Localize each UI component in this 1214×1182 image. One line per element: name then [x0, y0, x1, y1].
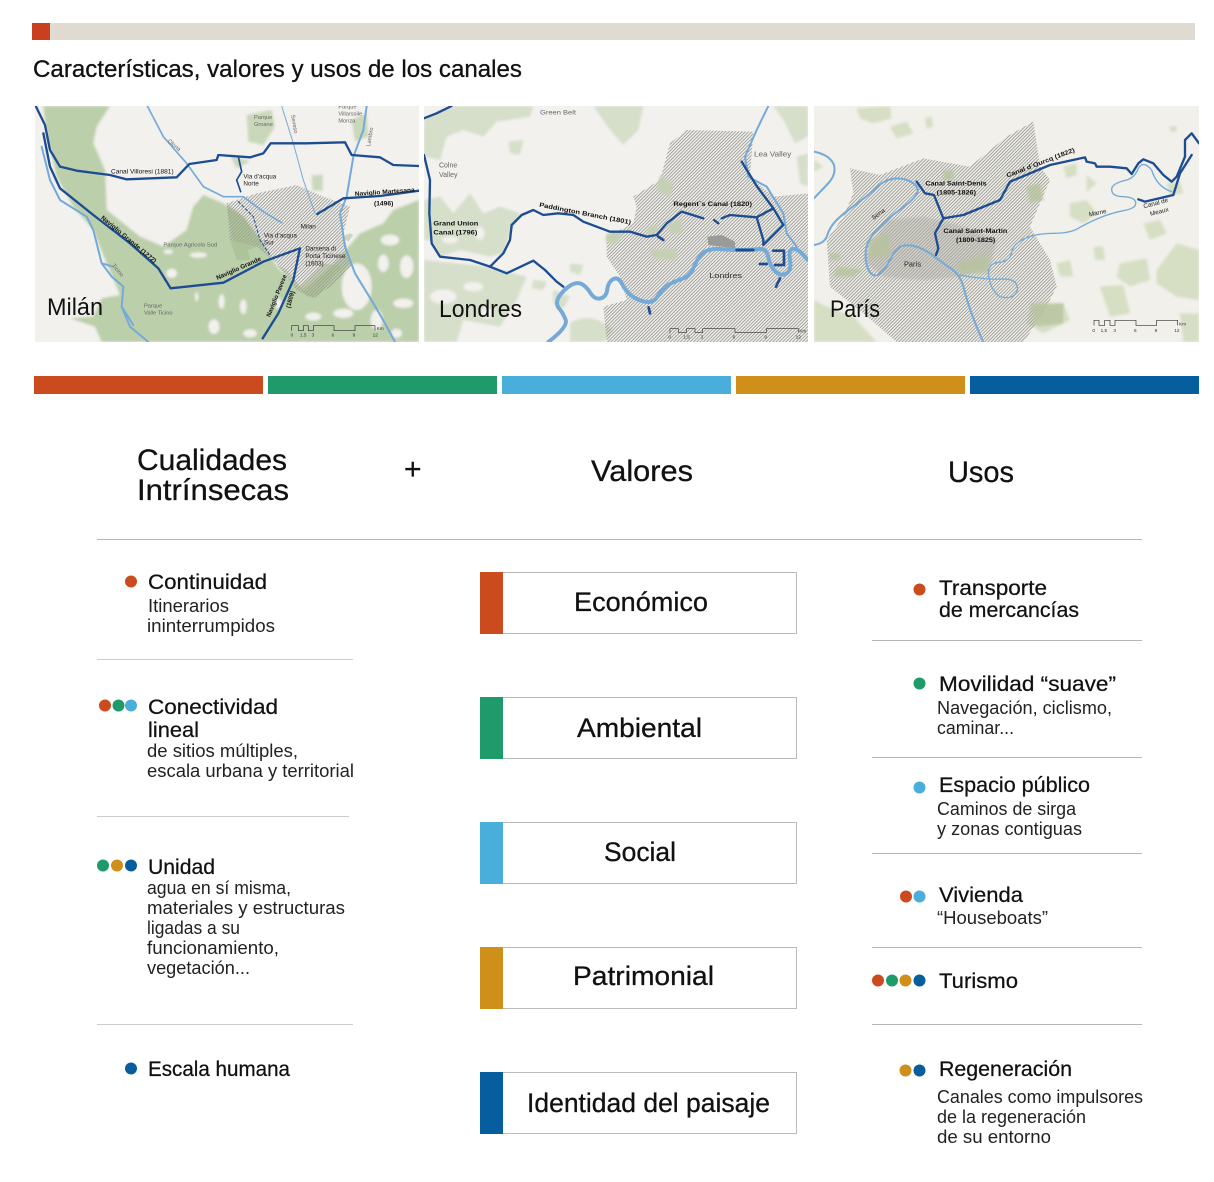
panel: map of Paris: (1809-1825)	[956, 237, 995, 244]
panel: map of Paris: París	[904, 259, 921, 268]
use: Regeneración	[900, 1058, 1143, 1147]
use: Regeneración: de su entorno	[937, 1127, 1051, 1147]
panel: map of Milan: (1603)	[305, 260, 324, 267]
panel: map of Paris: Sena	[870, 207, 887, 222]
panel: map of London: Green Belt	[540, 109, 576, 116]
panel: map of London: Canal (1796)	[433, 229, 477, 236]
quality: Conectividad lineal	[99, 696, 354, 781]
value box: Social: Social	[604, 837, 676, 867]
use: Regeneración: Regeneración	[939, 1058, 1072, 1081]
panel: map of Milan: Via d’acqua	[243, 173, 277, 180]
panel: map of Paris: 0	[1092, 328, 1095, 333]
panel: map of Milan: Villarssile	[338, 111, 362, 117]
quality: Conectividad lineal: de sitios múltiples,	[147, 741, 298, 761]
use: Vivienda: Vivienda	[939, 884, 1023, 907]
map label: Milán: Milán	[47, 294, 103, 321]
panel: map of London: 0	[668, 334, 671, 339]
panel: map of London: Valley	[439, 172, 458, 179]
use: Movilidad suave: caminar...	[937, 718, 1014, 738]
panel: map of London: Regent´s Canal (1820)	[673, 201, 752, 208]
use: Regeneración: Canales como impulsores	[937, 1087, 1143, 1107]
use: Espacio público	[914, 774, 1090, 839]
use: Transporte de mercancías: de mercancías	[939, 599, 1079, 622]
panel: map of Paris: 1,5	[1101, 328, 1108, 333]
panel: map of Milan: Via d’acqua	[264, 232, 297, 239]
panel: map of Milan: (1809)	[285, 290, 296, 309]
quality: Conectividad lineal: lineal	[148, 719, 199, 742]
panel: map of Milan: Parque	[144, 303, 162, 309]
panel: map of Milan: (1496)	[374, 200, 393, 207]
panel: map of Milan: Valle Ticino	[144, 311, 173, 317]
panel: map of Paris	[814, 106, 1199, 342]
panel: map of Milan: 9	[353, 333, 356, 338]
value box: Identidad del paisaje	[480, 1072, 796, 1134]
quality: Escala humana: Escala humana	[148, 1058, 290, 1081]
heading: Cualidades Intrínsecas: Cualidades	[137, 444, 287, 477]
quality: Unidad: materiales y estructuras	[147, 898, 345, 918]
use: Movilidad suave: Navegación, ciclismo,	[937, 698, 1112, 718]
panel: map of London: Londres	[709, 271, 742, 280]
plus sign: +	[404, 453, 422, 486]
map label: París: París	[830, 296, 880, 323]
panel: map of London: 3	[701, 334, 704, 339]
value box: Ambiental: Ambiental	[577, 713, 702, 743]
panel: map of Milan	[34, 104, 419, 342]
quality: Continuidad: Continuidad	[148, 571, 267, 594]
use: Espacio público: Espacio público	[939, 774, 1090, 797]
panel: map of Paris: Canal Saint-Denis	[925, 180, 987, 187]
quality: Unidad	[97, 856, 345, 978]
panel: map of Paris: 9	[1155, 328, 1158, 333]
quality: Continuidad: Itinerarios	[148, 596, 229, 616]
panel: map of Milan: Seveso	[289, 114, 298, 134]
panel: map of London: 6	[733, 334, 736, 339]
panel: map of London: Grand Union	[433, 221, 478, 228]
panel: map of Milan: Km	[377, 326, 384, 331]
value box: Patrimonial: Patrimonial	[573, 961, 714, 991]
panel: map of London: Km	[799, 329, 806, 334]
panel: map of Paris: Km	[1179, 322, 1186, 327]
panel: map of London: Paddington Branch (1801)	[539, 202, 632, 226]
panel: map of Milan: Naviglio Pavese	[265, 273, 289, 318]
value box: Identidad del paisaje: Identidad del paisaje	[527, 1088, 770, 1118]
panel: map of Milan: Parque Agricola Sud	[163, 243, 217, 249]
use: Turismo	[872, 970, 1018, 993]
value box: Patrimonial	[480, 947, 796, 1009]
value box: Económico	[480, 572, 796, 634]
quality: Unidad: Unidad	[148, 856, 215, 879]
panel: map of London: Colne	[439, 162, 457, 169]
panel: map of Milan: Milan	[301, 224, 316, 231]
value box: Ambiental	[480, 697, 796, 759]
panel: map of Milan: Naviglio Martesana	[355, 187, 415, 198]
use: Vivienda	[900, 884, 1048, 928]
panel: map of Milan: Lambro	[366, 127, 375, 147]
panel: map of Milan: Parque	[254, 115, 272, 121]
use: Movilidad suave	[914, 673, 1116, 738]
map label: Londres: Londres	[439, 296, 522, 323]
use: Transporte de mercancías: Transporte	[939, 577, 1047, 600]
use: Espacio público: y zonas contiguas	[937, 819, 1082, 839]
quality: Conectividad lineal: escala urbana y territorial	[147, 761, 354, 781]
quality: Conectividad lineal: Conectividad	[148, 696, 278, 719]
panel: map of Milan: Groane	[254, 122, 273, 128]
panel: map of Paris: Canal Saint-Martin	[943, 228, 1007, 235]
quality: Unidad: funcionamiento,	[147, 938, 279, 958]
heading: Valores: Valores	[591, 455, 693, 488]
colour legend bar	[34, 376, 1199, 394]
panel: map of Paris: Canal de	[1143, 197, 1169, 210]
panel: map of Paris: Marne	[1088, 208, 1108, 219]
use: Vivienda: “Houseboats”	[937, 908, 1048, 928]
quality: Continuidad: ininterrumpidos	[147, 616, 275, 636]
panel: map of Paris: 6	[1134, 328, 1137, 333]
panel: map of London: Lea Valley	[754, 152, 792, 159]
panel: map of Milan: Porta Ticinese	[305, 253, 346, 260]
heading: Usos: Usos	[948, 456, 1014, 489]
use: Turismo: Turismo	[939, 970, 1018, 993]
panel: map of London: 12	[796, 334, 801, 339]
value box: Social	[480, 822, 796, 884]
quality: Unidad: ligadas a su	[147, 918, 240, 938]
panel: map of Paris: Meaux	[1149, 206, 1170, 218]
panel: map of Milan: Naviglio Grande	[215, 256, 263, 282]
panel: map of Paris: 3	[1113, 328, 1116, 333]
quality: Unidad: agua en sí misma,	[147, 878, 291, 898]
header bar	[32, 23, 1195, 40]
panel: map of Milan: Olona	[166, 139, 182, 153]
panel: map of Milan: Sur	[264, 240, 274, 247]
panel: map of London	[424, 106, 808, 342]
use: Regeneración: de la regeneración	[937, 1107, 1086, 1127]
panel: map of Milan: Darsena di	[305, 245, 336, 252]
heading: Cualidades Intrínsecas: Intrínsecas	[137, 474, 289, 507]
panel: map of Milan: 12	[373, 333, 378, 338]
use: Espacio público: Caminos de sirga	[937, 799, 1077, 819]
heading: Cualidades Intrínsecas	[137, 444, 289, 507]
use: Movilidad suave: Movilidad “suave”	[939, 673, 1116, 696]
panel: map of Milan: 3	[312, 333, 315, 338]
panel: map of Paris: Canal d´Ourcq (1822)	[1006, 147, 1076, 180]
quality: Unidad: vegetación...	[147, 958, 250, 978]
panel: map of Milan: 6	[332, 333, 335, 338]
use: Transporte de mercancías	[914, 577, 1079, 622]
panel: map of Milan: Ticino	[110, 263, 124, 278]
panel: map of Milan: 0	[291, 333, 294, 338]
panel: map of Milan: Norte	[243, 181, 259, 188]
title: Características, valores y usos de los canales	[33, 56, 522, 83]
panel: map of Milan: Canal Villoresi (1881)	[111, 168, 174, 175]
panel: map of London: 9	[764, 334, 767, 339]
quality: Continuidad	[125, 571, 275, 636]
panel: map of Milan: Monza	[338, 118, 356, 124]
panel: map of Milan: 1.5	[300, 333, 307, 338]
panel: map of Paris: (1805-1826)	[937, 189, 976, 196]
panel: map of Milan: Naviglio Grande (1272)	[99, 215, 158, 265]
panel: map of London: 1.5	[683, 334, 690, 339]
panel: map of Paris: 12	[1174, 328, 1180, 333]
panel: map of Milan: Parque	[338, 104, 357, 110]
value box: Económico: Económico	[574, 587, 708, 617]
